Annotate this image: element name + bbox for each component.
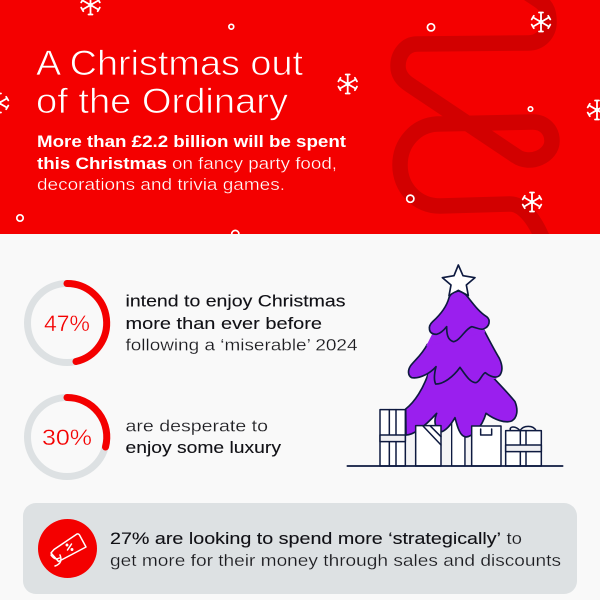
intro text: this Christmas xyxy=(37,154,167,173)
text: 47% statement: intend to enjoy Christmas xyxy=(126,292,346,311)
illustration: Christmas tree with gifts xyxy=(347,265,563,466)
callout text: 27% are looking to spend more ‘strategically’ xyxy=(110,529,501,548)
gift boxes xyxy=(380,410,541,466)
donut chart: 30% xyxy=(28,397,107,476)
donut chart: 30%: 30% xyxy=(42,425,92,450)
text: 30% statement: enjoy some luxury xyxy=(126,438,282,457)
star xyxy=(442,265,475,296)
donut chart: 47% xyxy=(28,283,107,362)
intro text: decorations and trivia games. xyxy=(37,175,285,194)
callout text xyxy=(110,529,561,570)
panel: strategic spending callout xyxy=(23,503,577,594)
intro text: on fancy party food, xyxy=(172,154,337,173)
title: A Christmas out xyxy=(36,44,303,83)
title xyxy=(36,44,303,121)
icon: discount tag xyxy=(38,519,97,578)
ground line xyxy=(347,463,563,468)
intro text: More than £2.2 billion will be spent xyxy=(37,132,346,151)
text: 30% statement xyxy=(126,417,282,457)
tree xyxy=(406,291,517,437)
callout text: to xyxy=(506,529,522,548)
text: 47% statement xyxy=(126,292,358,355)
callout text: get more for their money through sales and discounts xyxy=(110,551,561,570)
text: 47% statement: more than ever before xyxy=(126,314,322,333)
snowflakes and rings xyxy=(0,0,600,238)
text: 30% statement: are desperate to xyxy=(126,417,268,436)
back boxes xyxy=(405,418,472,466)
decorative ribbon xyxy=(398,0,552,242)
text: 47% statement: following a ‘miserable’ 2024 xyxy=(126,336,358,355)
intro text xyxy=(37,132,346,194)
donut chart: 47%: 47% xyxy=(44,311,90,336)
title: of the Ordinary xyxy=(36,82,289,121)
panel: red header xyxy=(0,0,600,242)
